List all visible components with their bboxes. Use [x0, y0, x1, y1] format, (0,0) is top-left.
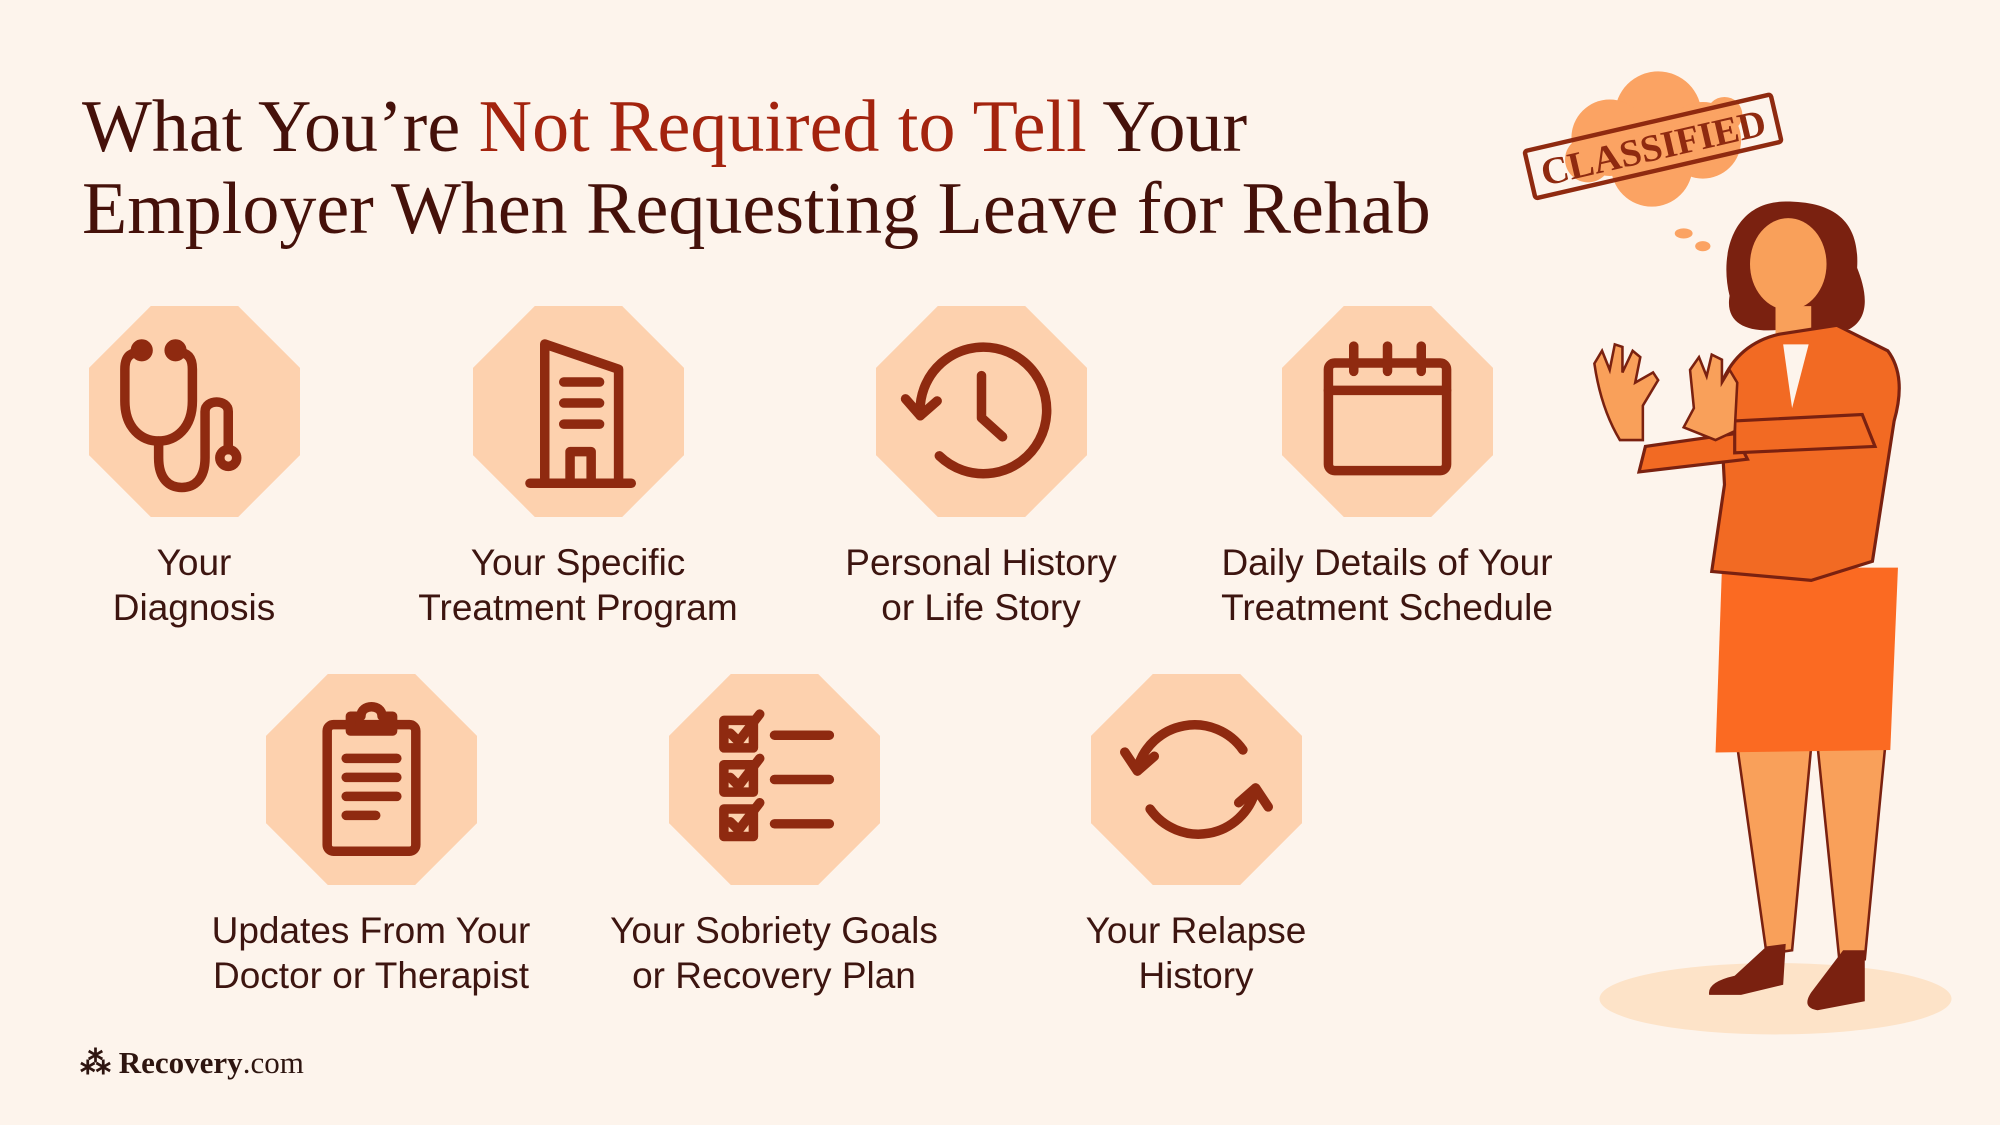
label: [1221, 542, 1553, 628]
label: [212, 910, 530, 996]
title: Employer When Requesting Leave for Rehab: [82, 168, 1431, 250]
jacket: [1712, 325, 1899, 580]
icon: clipboard: [266, 674, 477, 885]
icon: stethoscope: [89, 306, 300, 517]
label: Treatment Schedule: [1221, 587, 1553, 628]
label: or Life Story: [881, 587, 1081, 628]
label: Doctor or Therapist: [213, 955, 529, 996]
skirt: [1716, 568, 1898, 753]
label: [610, 910, 938, 996]
label: Your Specific: [471, 542, 685, 583]
shoes: [1709, 944, 1786, 995]
thought cloud: [1565, 71, 1742, 251]
label: [113, 542, 275, 628]
title: What You’re Not Required to Tell Your: [82, 86, 1247, 168]
icon: checklist: [669, 674, 880, 885]
item: doctor updates: [212, 674, 530, 996]
label: Your: [157, 542, 231, 583]
legs: [1737, 746, 1885, 959]
item: relapse history: [1086, 674, 1306, 996]
icon: cycle arrows: [1091, 674, 1302, 885]
label: History: [1138, 955, 1254, 996]
item: diagnosis: [89, 306, 300, 628]
icon: calendar: [1282, 306, 1493, 517]
label: Treatment Program: [418, 587, 738, 628]
stamp: classified: CLASSIFIED: [1537, 102, 1770, 195]
item: personal history: [845, 306, 1117, 628]
label: Personal History: [845, 542, 1117, 583]
icon: building: [473, 306, 684, 517]
label: Your Sobriety Goals: [610, 910, 938, 951]
label: Diagnosis: [113, 587, 275, 628]
label: [1086, 910, 1306, 996]
hands: [1594, 344, 1658, 440]
face & neck: [1776, 306, 1811, 344]
label: [845, 542, 1117, 628]
logo: ⁂ Recovery.com: [80, 1045, 304, 1080]
shadow: [1599, 963, 1952, 1034]
label: [418, 542, 738, 628]
item: sobriety goals: [610, 674, 938, 996]
hair: [1726, 202, 1865, 330]
arms: [1639, 434, 1747, 472]
item: daily details: [1221, 306, 1553, 628]
title: [82, 86, 1431, 250]
label: or Recovery Plan: [632, 955, 916, 996]
icon: history clock: [876, 306, 1087, 517]
label: Your Relapse: [1086, 910, 1306, 951]
label: Updates From Your: [212, 910, 530, 951]
item: treatment program: [418, 306, 738, 628]
label: Daily Details of Your: [1221, 542, 1553, 583]
